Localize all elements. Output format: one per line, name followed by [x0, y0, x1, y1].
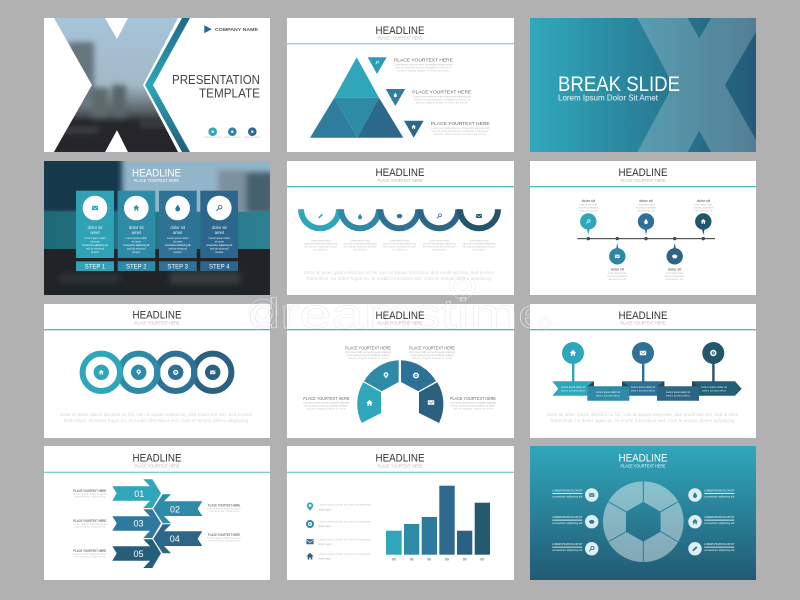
left icon items: [552, 488, 598, 555]
ring hubs with icons: [94, 365, 220, 380]
legend list: Lorem ipsum dolor sit amet consectetur: [318, 538, 371, 542]
label top right: dolore magna aliqua ut enim: [412, 356, 453, 360]
X-shaped city photo: [54, 18, 178, 152]
label top left: PLACE YOURTEXT HERE: [345, 346, 391, 350]
legend list: Lorem ipsum dolor sit amet consectetur: [318, 520, 371, 524]
milestone 3: sit amet consectetur: [636, 206, 656, 210]
headline: HEADLINE: [132, 310, 182, 322]
label top left: dolore magna aliqua ut enim: [348, 356, 389, 360]
step 3 card: [159, 191, 197, 271]
step 2 card: tempor: [132, 250, 140, 254]
arc captions: incididunt: [392, 248, 407, 252]
arc captions: elit sed do eiusmod tempor: [462, 244, 496, 248]
bar chart: 00: [445, 558, 449, 562]
teal chevron: [145, 18, 190, 152]
headline: HEADLINE: [618, 452, 668, 464]
subheadline: PLACE YOURTEXT HERE: [620, 464, 666, 468]
arc captions: incididunt: [353, 248, 367, 252]
arrow 01: [112, 479, 161, 508]
step 3 card: dolor sit: [170, 225, 186, 230]
milestone 1: adipiscing elit: [579, 208, 598, 212]
arc chain: [301, 209, 498, 228]
title: TEMPLATE: [199, 85, 260, 100]
icon: company arrow: [204, 25, 212, 33]
arc captions: [304, 238, 496, 252]
left labels: PLACE YOURTEXT HERE: [73, 519, 107, 523]
legend list: dolore magna: [318, 508, 332, 512]
bar chart: 00: [410, 558, 414, 562]
milestone 5: dolor sit: [697, 199, 711, 203]
arrow 05: 05: [133, 549, 144, 559]
step 1 card: Lorem ipsum dolor: [84, 236, 106, 240]
bar chart: [386, 486, 490, 562]
slide 2: triangle diagram: [287, 18, 514, 152]
arc captions: sit amet consectetur adipiscing: [304, 242, 338, 246]
ribbon: Lorem ipsum dolor sit: [631, 385, 655, 389]
headline: HEADLINE: [376, 310, 424, 322]
label top left: sed do eiusmod tempor incididunt ut labore: [346, 353, 390, 357]
ring chain: [83, 354, 231, 391]
slide 11: bar chart: [287, 446, 514, 580]
step 4 card: consectetur adipiscing elit: [206, 243, 233, 247]
left labels: Lorem ipsum dolor sit amet: [73, 522, 106, 526]
legend list: Lorem ipsum dolor sit amet consectetur: [318, 502, 371, 506]
bar chart: 00: [427, 558, 431, 562]
cover icons: dolor sit amet: [205, 135, 221, 139]
slide 10: numbered arrows: [44, 446, 270, 580]
right labels: consectetur adipiscing: [208, 538, 240, 542]
step 2 card: sit amet: [132, 240, 141, 244]
step 3 card: amet: [173, 230, 183, 235]
step 1 card: sit amet: [90, 240, 100, 244]
left icon items: LOREM IPSUM DOLOR SIT: [552, 515, 583, 519]
legend list: Lorem ipsum dolor sit amet consectetur: [318, 552, 371, 556]
step 2 card: dolor sit: [129, 225, 144, 230]
step 1 card: tempor: [91, 250, 99, 254]
subheadline: PLACE YOURTEXT HERE: [378, 178, 423, 183]
left labels: [73, 489, 107, 558]
left icon items: consectetur adipiscing elit: [552, 494, 583, 498]
right icon items: consectetur adipiscing elit: [704, 494, 735, 498]
paragraph: Rationibus, no debet fugue eu, te eruditi forensibus sed. Cum te tempor dolore adipiscing: [550, 418, 735, 423]
headline: HEADLINE: [376, 167, 424, 179]
timeline axis: [577, 237, 715, 240]
right icon items: LOREM IPSUM DOLOR SIT: [704, 488, 735, 492]
paragraph: Dolor sit amet, ipsum discitura cu his, cum at aquam instructior, dicit erudit sed vim. Sed in enim: [60, 412, 252, 417]
arc captions: sit amet consectetur adipiscing: [462, 242, 496, 246]
left icon items: LOREM IPSUM DOLOR SIT: [552, 488, 583, 492]
milestone 3: [636, 199, 656, 235]
arrow 03: [112, 509, 161, 538]
milestone 5: sit amet consectetur: [693, 206, 713, 210]
step 1 card: amet: [90, 230, 100, 235]
ribbon: [552, 381, 742, 401]
ribbon: amet consectetur: [702, 388, 726, 392]
label top right: PLACE YOURTEXT HERE: [409, 346, 455, 350]
paragraph: [60, 412, 252, 423]
arc captions: Lorem ipsum dolor: [390, 238, 410, 242]
translucent X: [637, 18, 756, 152]
title: [172, 72, 260, 100]
milestone 4: [665, 243, 685, 281]
text block 3: PLACE YOURTEXT HERE: [431, 121, 490, 126]
label top right: Lorem ipsum dolor sit amet, consectetur adipiscing: [409, 350, 456, 354]
ribbon: amet consectetur: [561, 388, 585, 392]
left icon items: consectetur adipiscing elit: [552, 521, 583, 525]
arc captions: incididunt: [314, 248, 328, 252]
text block 1: dolore magna aliqua ut enim ad minim: [398, 68, 450, 72]
left labels: consectetur adipiscing: [74, 494, 106, 498]
arrow 04: 04: [170, 534, 180, 544]
arc captions: elit sed do eiusmod tempor: [304, 244, 337, 248]
slide 3: break slide: [530, 18, 756, 152]
cover icons: dolor sit amet: [244, 135, 261, 139]
break slide title: BREAK SLIDE: [558, 73, 680, 96]
step 4 card: [200, 191, 238, 271]
headline: HEADLINE: [132, 168, 181, 180]
paragraph: Rationibus, no debet fugue eu, te eruditi forensibus sed. Cum te tempor dolore adipiscing: [64, 418, 249, 423]
label left: [303, 396, 350, 410]
text block 1: [394, 58, 453, 72]
bar chart: 00: [480, 558, 484, 562]
arrow 03: 03: [133, 518, 144, 528]
arrow 02: 02: [170, 504, 180, 514]
ribbon: Lorem ipsum dolor sit: [701, 385, 727, 389]
milestone 5: [693, 199, 713, 235]
label top right: [409, 346, 456, 360]
triangle marker 1: [368, 57, 387, 74]
right labels: Lorem ipsum dolor sit amet: [208, 506, 241, 510]
arc captions: incididunt: [472, 248, 486, 252]
milestone 1: dolor sit: [582, 199, 596, 203]
slide 12: hexagon wheel: [530, 446, 756, 580]
step 3 card: sed do eiusmod: [169, 246, 187, 250]
headline: HEADLINE: [376, 25, 424, 37]
milestone 1: sit amet consectetur: [578, 206, 598, 210]
right labels: PLACE YOURTEXT HERE: [208, 503, 241, 507]
cover icons: [205, 127, 261, 139]
right labels: consectetur adipiscing: [208, 509, 240, 513]
wheel: [603, 481, 684, 562]
pin 3: [702, 342, 724, 382]
text block 3: sed do eiusmod tempor incididunt ut labore et: [432, 129, 488, 133]
left labels: PLACE YOURTEXT HERE: [73, 489, 107, 493]
milestone 2: Lorem ipsum dolor: [608, 271, 626, 275]
right labels: Lorem ipsum dolor sit amet: [208, 536, 241, 540]
label left: dolore magna aliqua ut enim: [306, 406, 347, 410]
arc captions: sit amet consectetur adipiscing: [344, 242, 377, 246]
label left: PLACE YOURTEXT HERE: [303, 396, 349, 401]
arc captions: Lorem ipsum dolor: [469, 238, 489, 242]
milestone 4: adipiscing elit: [666, 277, 684, 281]
triangle marker 3: [404, 121, 424, 138]
subheadline: PLACE YOURTEXT HERE: [134, 464, 180, 468]
headline: HEADLINE: [618, 310, 668, 322]
company name: COMPANY NAME: [215, 27, 259, 33]
pyramid: [310, 57, 403, 138]
label right: sed do eiusmod tempor incididunt ut labore: [451, 404, 496, 408]
paragraph: [547, 412, 738, 423]
slide 5: scalloped arcs: [287, 161, 514, 295]
right icon items: consectetur adipiscing elit: [704, 521, 735, 525]
subheadline: PLACE YOURTEXT HERE: [134, 178, 179, 183]
slide 9: ribbon timeline: [530, 304, 756, 438]
segment 1: [357, 382, 381, 423]
step 2 card: Lorem ipsum dolor: [126, 236, 147, 240]
label top right: sed do eiusmod tempor incididunt ut labore: [410, 353, 454, 357]
ribbon: Lorem ipsum dolor sit: [596, 390, 620, 394]
watermark lettering over slide tops: dreamstime: [248, 290, 550, 337]
headline: HEADLINE: [132, 452, 182, 464]
arc captions: elit sed do eiusmod tempor: [423, 244, 456, 248]
step 4 card: dolor sit: [212, 225, 227, 230]
step 2 card: [118, 191, 155, 271]
milestone 4: dolor sit: [668, 268, 682, 272]
milestone 2: [607, 243, 627, 281]
arc captions: elit sed do eiusmod tempor: [383, 244, 416, 248]
bar chart: 00: [392, 558, 396, 562]
label right: Lorem ipsum dolor sit amet, consectetur adipiscing: [450, 400, 496, 404]
text block 2: [412, 89, 471, 104]
milestone 3: dolor sit: [639, 199, 654, 203]
arc icons: [318, 213, 482, 219]
title: PRESENTATION: [172, 72, 260, 87]
step 4 card: sit amet: [215, 240, 224, 244]
triangle marker 2: [386, 89, 405, 106]
right icon items: LOREM IPSUM DOLOR SIT: [704, 542, 735, 546]
slide 1: presentation template cover: [44, 18, 270, 156]
arc captions: Lorem ipsum dolor: [311, 238, 331, 242]
step 4 card: amet: [215, 230, 225, 235]
milestone 1: [578, 199, 598, 235]
ribbon: amet consectetur: [631, 388, 655, 392]
arc captions: incididunt: [432, 248, 447, 252]
legend list: dolore magna: [318, 524, 332, 528]
arrow 02: [153, 494, 202, 523]
headline: HEADLINE: [376, 452, 424, 464]
paragraph: [304, 270, 494, 281]
text block 3: Lorem ipsum dolor sit amet, consectetur adipiscing elit: [431, 126, 489, 130]
step 3 card: Lorem ipsum dolor: [167, 236, 189, 240]
step 3 card: sit amet: [173, 240, 183, 244]
ribbon: amet consectetur: [596, 393, 620, 397]
legend list: dolore magna: [318, 542, 332, 546]
label left: Lorem ipsum dolor sit amet, consectetur adipiscing: [303, 400, 350, 404]
arrow 05: [112, 539, 161, 568]
step 1 card: [76, 191, 114, 271]
subheadline: PLACE YOURTEXT HERE: [378, 320, 423, 326]
paragraph: Dolor sit amet, ipsum discitura cu his, cum at aquam instructior, dicit erudit sed vim. Sed in enim: [304, 270, 494, 275]
text block 2: sed do eiusmod tempor incididunt ut labore et: [414, 98, 470, 102]
break slide subtitle: Lorem Ipsum Dolor Sit Amet: [558, 94, 659, 103]
slide 8: semicircle segments: [248, 290, 550, 438]
label right: PLACE YOURTEXT HERE: [450, 396, 496, 401]
right icon items: [688, 488, 735, 555]
legend list: [306, 502, 371, 560]
right icon items: consectetur adipiscing elit: [704, 548, 735, 552]
label right: [450, 396, 496, 410]
ribbon: amet consectetur: [666, 393, 690, 397]
blurred photo background: [38, 156, 274, 295]
step 1 card: STEP 1: [85, 264, 106, 270]
subheadline: PLACE YOURTEXT HERE: [134, 320, 180, 326]
subheadline: PLACE YOURTEXT HERE: [620, 320, 666, 326]
milestone 2: dolor sit: [611, 268, 625, 272]
step 3 card: STEP 3: [167, 264, 189, 270]
ribbon: Lorem ipsum dolor sit: [561, 385, 585, 389]
subheadline: PLACE YOURTEXT HERE: [620, 178, 666, 183]
milestone 3: adipiscing elit: [637, 208, 655, 212]
step 2 card: sed do eiusmod: [127, 246, 146, 250]
label top left: [345, 346, 392, 360]
pin 1: [562, 342, 584, 382]
right icon items: LOREM IPSUM DOLOR SIT: [704, 515, 735, 519]
step 4 card: Lorem ipsum dolor: [209, 236, 230, 240]
step 2 card: STEP 2: [126, 264, 147, 270]
milestone 1: Lorem ipsum dolor: [579, 202, 597, 206]
step 1 card: sed do eiusmod: [86, 246, 105, 250]
left icon items: consectetur adipiscing elit: [552, 548, 583, 552]
watermark swirls: [249, 273, 551, 329]
text block 2: Lorem ipsum dolor sit amet, consectetur adipiscing elit: [413, 94, 471, 98]
paragraph: Dolor sit amet, ipsum discitura cu his, cum at aquam instructior, dicit erudit sed vim. Sed in enim: [547, 412, 738, 417]
arc captions: Lorem ipsum dolor: [350, 238, 370, 242]
step 4 card: STEP 4: [209, 264, 230, 270]
text block 2: dolore magna aliqua ut enim ad minim: [416, 100, 469, 104]
arrow 01: 01: [134, 489, 144, 499]
step 3 card: consectetur adipiscing elit: [165, 243, 191, 247]
right labels: PLACE YOURTEXT HERE: [208, 533, 241, 537]
step 4 card: tempor: [215, 250, 223, 254]
milestone 5: adipiscing elit: [694, 208, 713, 212]
ribbon: Lorem ipsum dolor sit: [666, 390, 690, 394]
arc captions: Lorem ipsum dolor: [429, 238, 449, 242]
arc captions: elit sed do eiusmod tempor: [344, 244, 377, 248]
left icon items: LOREM IPSUM DOLOR SIT: [552, 542, 583, 546]
text block 3: [431, 121, 490, 136]
text block 1: Lorem ipsum dolor sit amet, consectetur adipiscing elit: [394, 62, 453, 66]
milestone 3: Lorem ipsum dolor: [637, 202, 655, 206]
step 1 card: consectetur adipiscing elit: [82, 243, 108, 247]
cover icons: dolor sit amet: [224, 135, 241, 139]
bar chart: 00: [463, 558, 467, 562]
left labels: consectetur adipiscing: [74, 554, 106, 558]
milestone 4: Lorem ipsum dolor: [666, 271, 684, 275]
milestone 2: sit amet consectetur: [607, 274, 627, 278]
slide 7: linked rings: [44, 304, 270, 438]
step 1 card: dolor sit: [88, 225, 103, 230]
step 4 card: sed do eiusmod: [210, 246, 229, 250]
pin 2: [632, 342, 654, 382]
arrow 04: [153, 524, 202, 553]
text block 2: PLACE YOURTEXT HERE: [412, 89, 471, 94]
arc captions: sit amet consectetur adipiscing: [423, 242, 456, 246]
left labels: Lorem ipsum dolor sit amet: [73, 552, 106, 556]
slide 4: four steps over photo: [38, 156, 274, 295]
paragraph: Rationibus, no debet fugue eu, te eruditi forensibus sed. Cum te tempor dolore adipiscing: [306, 276, 492, 281]
left labels: Lorem ipsum dolor sit amet: [73, 492, 106, 496]
milestone 2: adipiscing elit: [608, 277, 627, 281]
segment 2: [364, 360, 399, 391]
milestone 5: Lorem ipsum dolor: [694, 202, 712, 206]
label left: sed do eiusmod tempor incididunt ut labore: [304, 404, 348, 408]
segment 4: [419, 382, 443, 423]
arc captions: sit amet consectetur adipiscing: [383, 242, 416, 246]
text block 3: dolore magna aliqua ut enim ad minim: [434, 132, 487, 136]
step 2 card: amet: [132, 230, 142, 235]
milestone 4: sit amet consectetur: [665, 274, 685, 278]
step 2 card: consectetur adipiscing elit: [123, 243, 150, 247]
step 3 card: tempor: [174, 250, 182, 254]
left labels: consectetur adipiscing: [74, 524, 106, 528]
subheadline: PLACE YOURTEXT HERE: [378, 36, 423, 40]
text block 1: PLACE YOURTEXT HERE: [394, 58, 453, 62]
legend list: dolore magna: [318, 556, 332, 560]
right labels: [208, 503, 241, 542]
headline: HEADLINE: [618, 167, 668, 179]
subheadline: PLACE YOURTEXT HERE: [378, 464, 423, 468]
text block 1: sed do eiusmod tempor incididunt ut labore et: [396, 66, 452, 70]
label top left: Lorem ipsum dolor sit amet, consectetur adipiscing: [345, 350, 392, 354]
segment 3: [401, 360, 436, 391]
left labels: PLACE YOURTEXT HERE: [73, 549, 107, 553]
slide 6: timeline: [530, 161, 756, 295]
label right: dolore magna aliqua ut enim: [453, 406, 494, 410]
